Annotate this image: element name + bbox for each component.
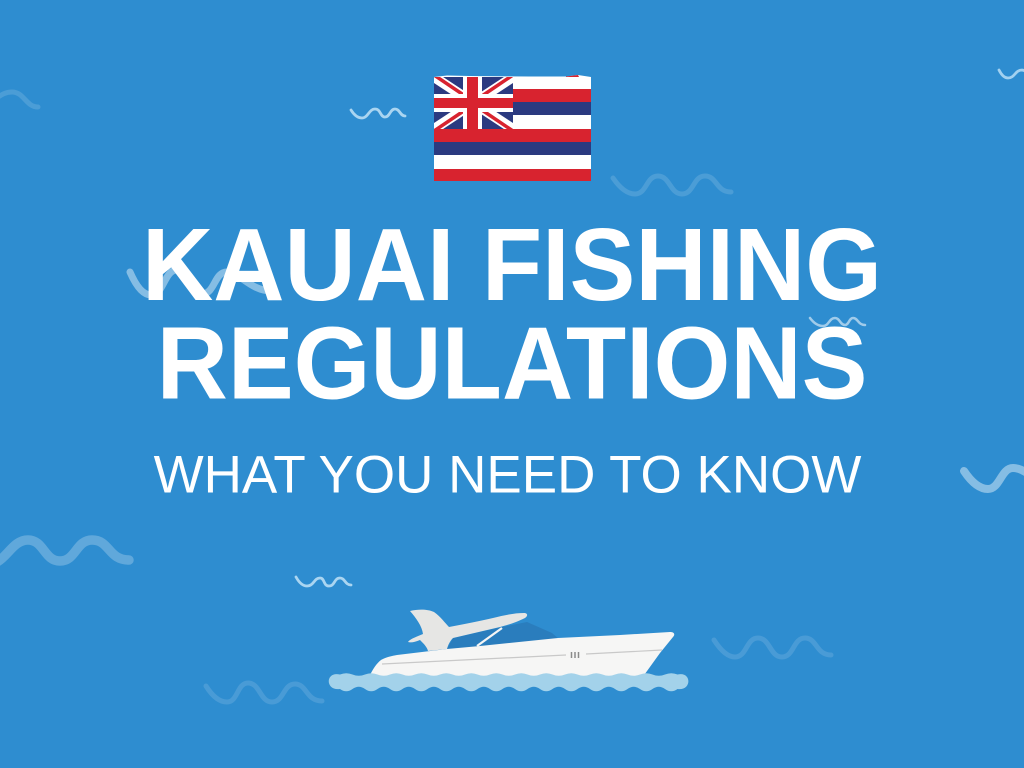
hull stripe [382, 650, 662, 664]
water [329, 673, 688, 691]
title: REGULATIONS [157, 307, 867, 421]
white windshield strut [477, 628, 502, 646]
radar arch [408, 610, 527, 651]
title: KAUAI FISHING [142, 208, 882, 322]
windshield and cabin glass [447, 622, 559, 649]
hull [369, 632, 674, 678]
icon: white motor yacht on water [329, 610, 688, 691]
hull vents [572, 652, 578, 658]
icon: Hawaiian flag [434, 75, 591, 181]
subtitle: WHAT YOU NEED TO KNOW [154, 446, 861, 504]
title [142, 208, 882, 421]
